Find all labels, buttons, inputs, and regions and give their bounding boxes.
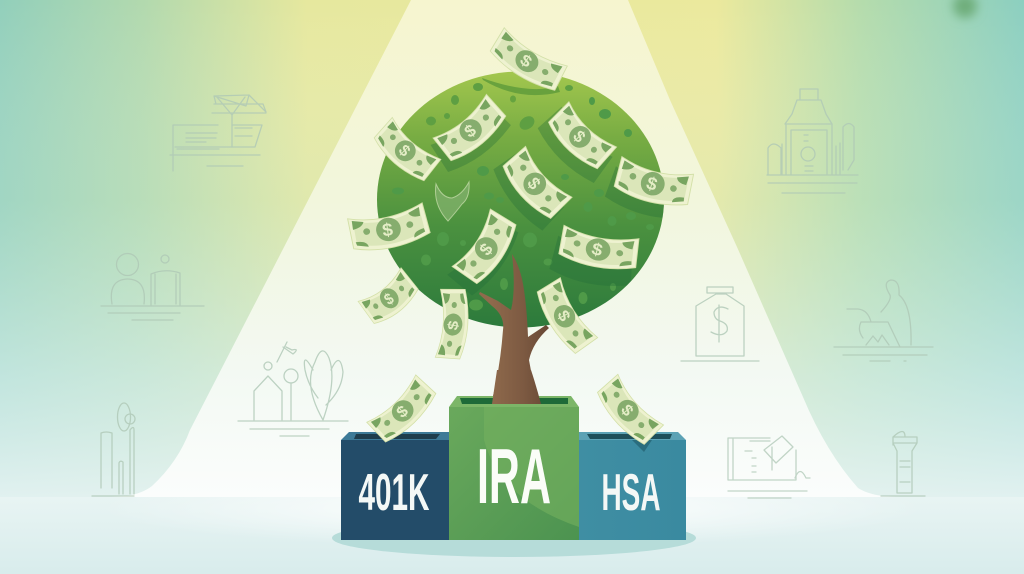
money bill: upper left: [370, 114, 443, 187]
money bill: upper left: $: [395, 142, 413, 160]
label: HSA: HSA: [602, 464, 660, 522]
label: IRA: IRA: [477, 432, 551, 520]
box: IRA: [449, 370, 579, 540]
money bill: falling into 401K: [364, 373, 441, 446]
tree crown: [377, 72, 664, 328]
money bill: upper center-right: $: [569, 127, 590, 147]
money bill: lower right: [556, 220, 643, 277]
money bill: upper center-left: $: [461, 120, 480, 142]
floor: [0, 497, 1024, 574]
icon: basket and document: [170, 95, 266, 171]
money bill: right: $: [644, 173, 660, 195]
money bill: top: [486, 24, 570, 97]
money bill: top: $: [517, 50, 536, 71]
money bill: upper center-left: [430, 92, 511, 165]
money bill: bottom left: $: [445, 320, 462, 331]
money bill: falling into HSA: $: [617, 401, 637, 420]
money bill: center: $: [523, 173, 545, 193]
leaf sketch outline: [436, 182, 469, 221]
bill shadows: [430, 106, 664, 289]
money bill: falling into HSA: [593, 371, 666, 450]
money bill: falling into 401K: $: [393, 402, 412, 422]
money bill: bottom right: $: [554, 307, 574, 325]
crown highlight: [482, 78, 560, 95]
money bill: lower center: [448, 206, 523, 288]
label: 401K: 401K: [358, 464, 430, 522]
money bill: bottom left: [431, 286, 473, 361]
trunk base in box: [492, 370, 541, 404]
trunk and branches: [479, 254, 549, 404]
box: 401K: [341, 432, 449, 540]
money bill: far left: [347, 202, 431, 253]
box: HSA: [579, 432, 686, 540]
money bill: lower left: [355, 266, 423, 327]
money bill: upper center-right: [544, 98, 619, 175]
icon: monument with bottles: [767, 89, 858, 193]
tree: [377, 72, 664, 404]
money bill: lower left: $: [382, 290, 398, 309]
spotlight cone: [110, 0, 900, 497]
money bill: far left: $: [381, 219, 395, 240]
icon: tower: [881, 432, 925, 496]
platform ellipse: [332, 519, 696, 557]
leaves: [392, 83, 654, 310]
icon: bars and spoon: [92, 403, 135, 496]
icon: house and plants: [238, 342, 348, 436]
money bill: lower right: $: [590, 239, 605, 260]
money bill: right: [611, 152, 697, 214]
icon: ledger and pencil: [728, 436, 810, 498]
money bill: lower center: $: [475, 239, 497, 259]
icon: dollar jar: [681, 287, 759, 361]
money bill: bottom right: [533, 275, 599, 358]
icon: person with ruler: [101, 254, 204, 320]
icon: person at table: [834, 280, 933, 361]
money bill: center: [499, 143, 574, 224]
